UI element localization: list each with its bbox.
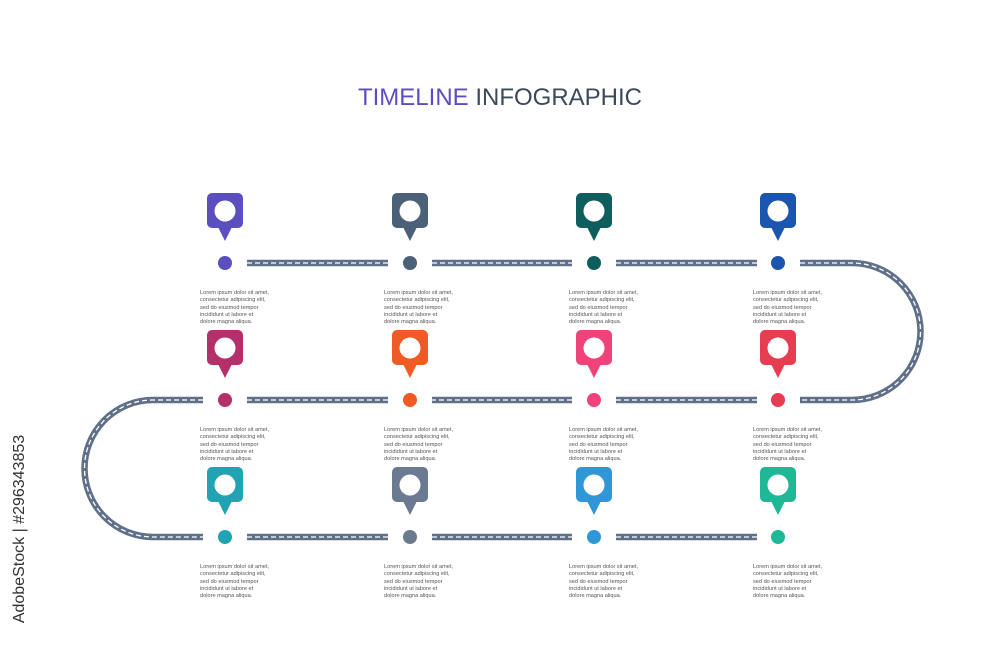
text: sed do eiusmod tempor xyxy=(753,305,811,311)
text: Lorem ipsum dolor sit amet, xyxy=(384,427,453,433)
text: Lorem ipsum dolor sit amet, xyxy=(384,564,453,570)
road xyxy=(84,263,920,537)
text: dolore magna aliqua. xyxy=(753,456,805,462)
text: incididunt ut labore et xyxy=(753,312,806,318)
text: dolore magna aliqua. xyxy=(569,593,621,599)
text: dolore magna aliqua. xyxy=(753,593,805,599)
text: dolore magna aliqua. xyxy=(384,593,436,599)
text: incididunt ut labore et xyxy=(200,312,253,318)
text: consectetur adipiscing elit, xyxy=(384,434,450,440)
text: incididunt ut labore et xyxy=(384,449,437,455)
text: Lorem ipsum dolor sit amet, xyxy=(200,290,269,296)
text: dolore magna aliqua. xyxy=(200,456,252,462)
text: incididunt ut labore et xyxy=(200,586,253,592)
watermark id: AdobeStock | #296343853 xyxy=(11,435,28,623)
text: Lorem ipsum dolor sit amet, xyxy=(569,290,638,296)
text: Lorem ipsum dolor sit amet, xyxy=(753,290,822,296)
text: incididunt ut labore et xyxy=(569,312,622,318)
text: consectetur adipiscing elit, xyxy=(200,571,266,577)
text: incididunt ut labore et xyxy=(753,449,806,455)
text: sed do eiusmod tempor xyxy=(200,305,258,311)
text: Lorem ipsum dolor sit amet, xyxy=(200,427,269,433)
row 3 pins xyxy=(207,467,796,544)
text: Lorem ipsum dolor sit amet, xyxy=(384,290,453,296)
text: dolore magna aliqua. xyxy=(384,456,436,462)
text: sed do eiusmod tempor xyxy=(569,579,627,585)
text: consectetur adipiscing elit, xyxy=(569,434,635,440)
text: Lorem ipsum dolor sit amet, xyxy=(753,564,822,570)
row 2 pins xyxy=(207,330,796,407)
text: consectetur adipiscing elit, xyxy=(753,297,819,303)
text: consectetur adipiscing elit, xyxy=(569,297,635,303)
text: consectetur adipiscing elit, xyxy=(569,571,635,577)
text: dolore magna aliqua. xyxy=(569,319,621,325)
text: consectetur adipiscing elit, xyxy=(384,571,450,577)
text: sed do eiusmod tempor xyxy=(200,442,258,448)
text: sed do eiusmod tempor xyxy=(569,442,627,448)
text: sed do eiusmod tempor xyxy=(200,579,258,585)
title: TIMELINE INFOGRAPHIC xyxy=(358,84,642,111)
text: incididunt ut labore et xyxy=(753,586,806,592)
text: consectetur adipiscing elit, xyxy=(200,434,266,440)
text: dolore magna aliqua. xyxy=(753,319,805,325)
text: consectetur adipiscing elit, xyxy=(753,434,819,440)
text: sed do eiusmod tempor xyxy=(753,442,811,448)
text: Lorem ipsum dolor sit amet, xyxy=(200,564,269,570)
text: dolore magna aliqua. xyxy=(200,319,252,325)
text: sed do eiusmod tempor xyxy=(569,305,627,311)
text: incididunt ut labore et xyxy=(569,586,622,592)
text: sed do eiusmod tempor xyxy=(384,442,442,448)
text: dolore magna aliqua. xyxy=(384,319,436,325)
text: incididunt ut labore et xyxy=(569,449,622,455)
text: sed do eiusmod tempor xyxy=(384,305,442,311)
text: sed do eiusmod tempor xyxy=(753,579,811,585)
text: incididunt ut labore et xyxy=(384,586,437,592)
text blocks xyxy=(200,290,822,599)
text: incididunt ut labore et xyxy=(384,312,437,318)
text: Lorem ipsum dolor sit amet, xyxy=(753,427,822,433)
row 1 pins xyxy=(207,193,796,270)
text: dolore magna aliqua. xyxy=(200,593,252,599)
text: Lorem ipsum dolor sit amet, xyxy=(569,564,638,570)
text: Lorem ipsum dolor sit amet, xyxy=(569,427,638,433)
text: incididunt ut labore et xyxy=(200,449,253,455)
text: dolore magna aliqua. xyxy=(569,456,621,462)
text: consectetur adipiscing elit, xyxy=(384,297,450,303)
text: consectetur adipiscing elit, xyxy=(200,297,266,303)
text: consectetur adipiscing elit, xyxy=(753,571,819,577)
text: sed do eiusmod tempor xyxy=(384,579,442,585)
